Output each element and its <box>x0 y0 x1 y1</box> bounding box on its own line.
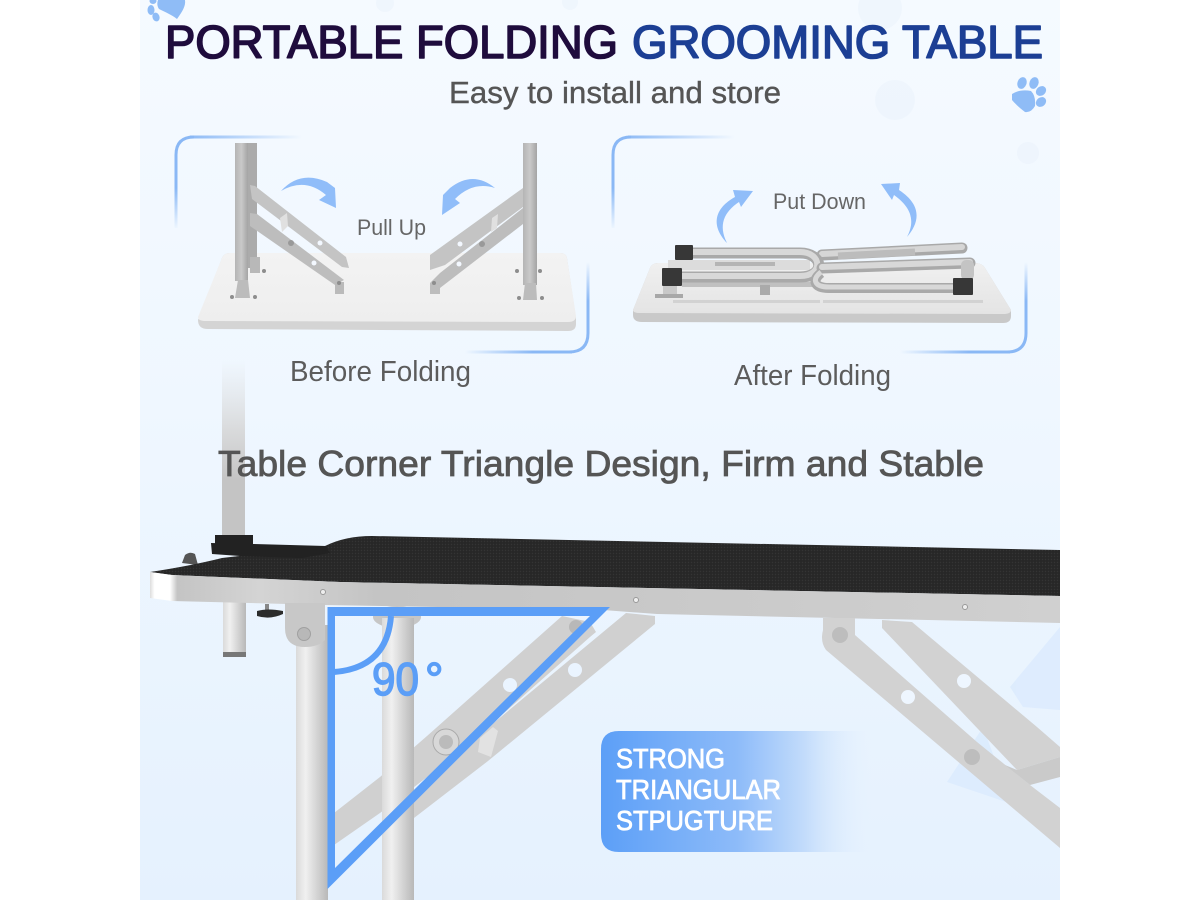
right brace straps <box>822 618 1060 848</box>
arrow: pull up right <box>442 179 495 215</box>
arrow: pull up left <box>281 178 336 208</box>
table top <box>150 536 1060 596</box>
clamp <box>211 535 330 558</box>
rear leg bracket <box>373 606 421 628</box>
left brace straps <box>334 613 655 845</box>
front leg <box>296 625 328 900</box>
folding table top: after <box>633 263 1011 323</box>
label: put down: Put Down <box>773 189 866 214</box>
callout text: TRIANGULAR <box>616 774 781 805</box>
angle arc <box>334 616 391 672</box>
title: PORTABLE FOLDING <box>165 16 618 68</box>
folding table top: before <box>198 253 576 331</box>
rear leg <box>382 618 414 900</box>
height knob <box>257 604 283 618</box>
label: before folding: Before Folding <box>290 356 471 388</box>
panel frame: after folding <box>613 137 1026 352</box>
frame rivets <box>320 590 968 610</box>
front leg rivet <box>298 628 310 640</box>
label: pull up: Pull Up <box>357 215 426 240</box>
icon: paw top right <box>1012 76 1048 112</box>
angle label: ° <box>425 653 443 705</box>
angle label: 90 <box>372 653 419 705</box>
title: GROOMING TABLE <box>632 16 1043 68</box>
panel: after folding <box>613 137 1026 392</box>
callout: strong triangular structure <box>601 731 873 852</box>
icon: paw top left <box>148 0 185 22</box>
callout text: STPUGTURE <box>616 805 773 836</box>
folding legs: before <box>230 143 544 300</box>
arrow: put down left <box>717 190 753 243</box>
table frame <box>150 572 1060 623</box>
panel: before folding <box>176 137 588 388</box>
faint background decorations <box>376 0 1039 164</box>
clamp knob <box>182 553 198 565</box>
background panel <box>140 0 1060 900</box>
faint background triangles <box>947 627 1060 805</box>
front leg bracket <box>285 603 325 647</box>
heading: table corner: Table Corner Triangle Design, Firm and Stable <box>218 443 984 484</box>
brace hinge plate <box>478 727 498 757</box>
arrow: put down right <box>881 183 917 237</box>
callout text: STRONG <box>616 743 725 774</box>
folded legs <box>655 245 983 303</box>
right brace holes and rivets <box>832 627 980 765</box>
brace rivets <box>433 620 583 755</box>
subtitle: Easy to install and store <box>449 75 781 110</box>
label: after folding: After Folding <box>734 360 891 392</box>
triangle highlight <box>328 607 610 889</box>
grooming arm pole lower <box>223 598 246 657</box>
grooming arm pole upper <box>222 360 245 545</box>
grooming table illustration <box>150 535 1060 900</box>
brace holes <box>503 663 582 692</box>
panel frame: before folding <box>176 137 588 352</box>
callout background <box>601 731 873 852</box>
